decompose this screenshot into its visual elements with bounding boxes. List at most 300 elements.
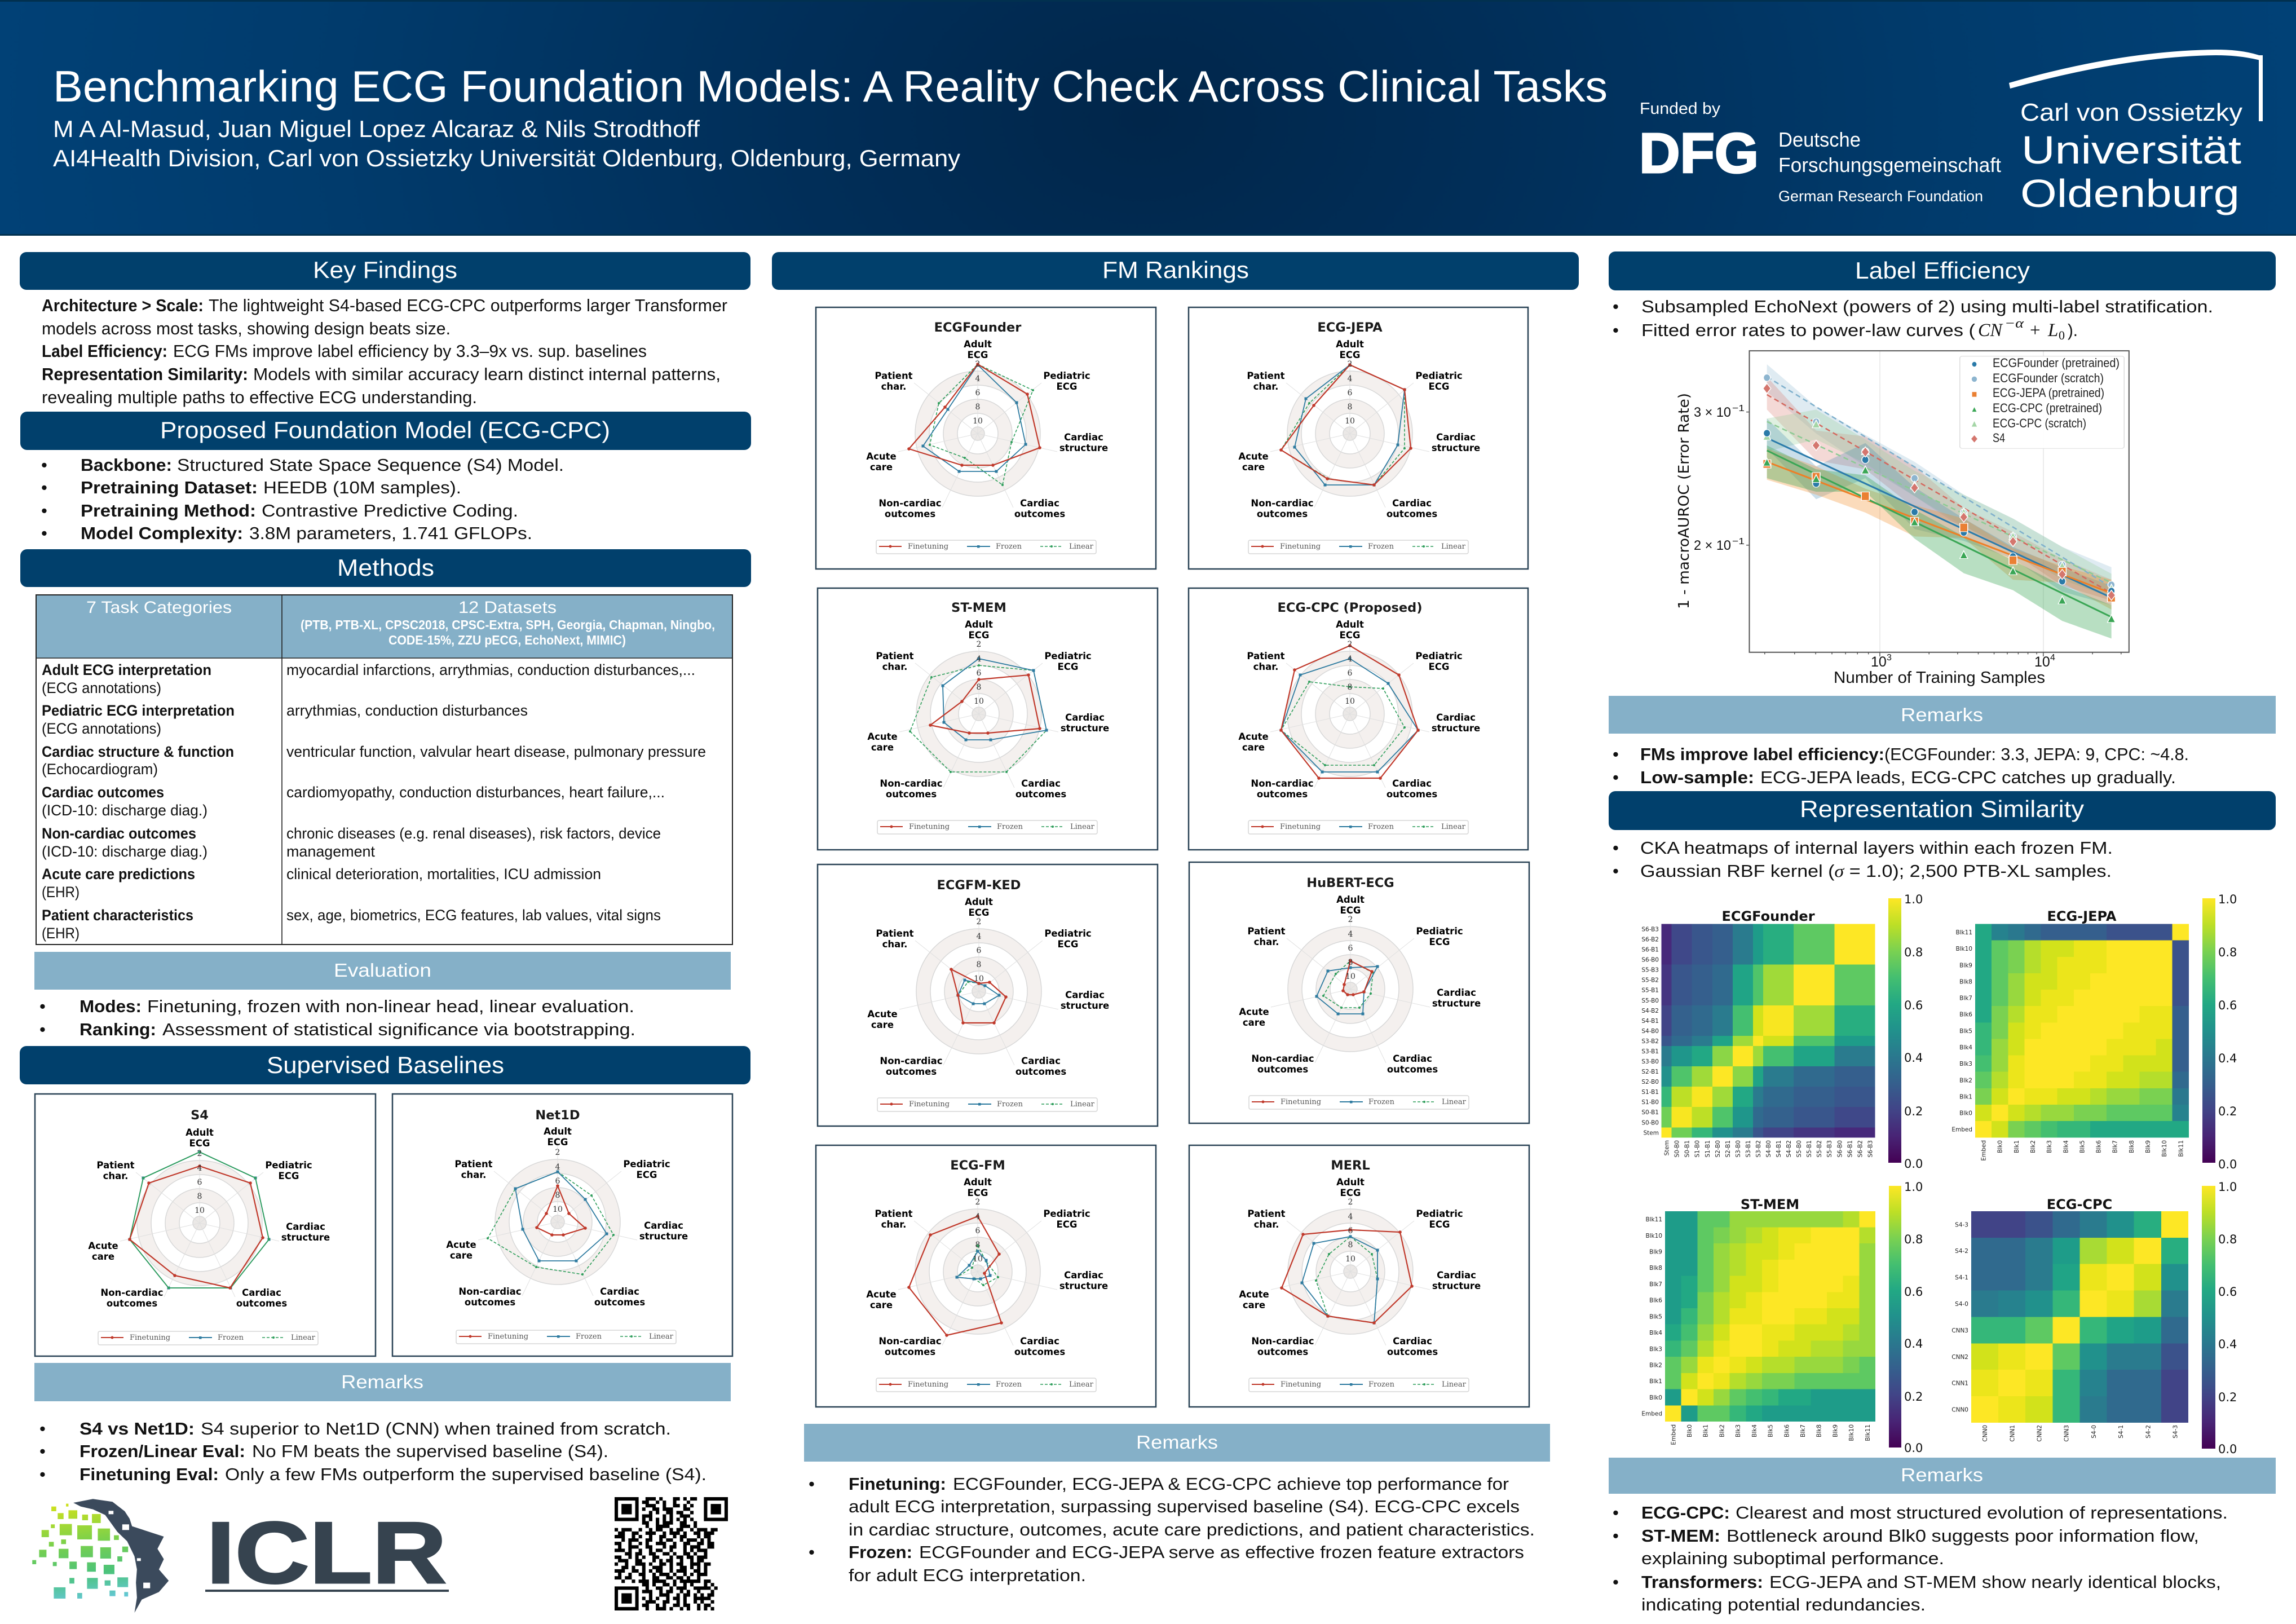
- ECG-JEPA row labels: [1951, 929, 1972, 1133]
- radar chart: ECG-CPC (Proposed): 2: [1348, 640, 1352, 649]
- ST-MEM row labels: Blk6: [1649, 1298, 1662, 1304]
- radar chart: ECG-JEPA: 6: [1348, 389, 1353, 398]
- text block: label efficiency bullets: •: [1613, 320, 1619, 340]
- text block: key findings: revealing multiple paths to effective ECG understanding.: [42, 387, 477, 407]
- ECG-JEPA column labels: Blk7: [2112, 1140, 2119, 1153]
- radar chart: ECGFounder: 4: [975, 374, 981, 383]
- ECG-JEPA column labels: Blk5: [2079, 1140, 2086, 1153]
- text block: baseline remarks: Frozen/Linear Eval:: [80, 1441, 245, 1461]
- radar chart: ECG-CPC (Proposed): char.: [1253, 661, 1278, 672]
- radar chart: ECG-JEPA: outcomes: [1387, 509, 1437, 519]
- radar chart: ECGFM-KED: Pediatric: [1044, 928, 1092, 939]
- heading: Proposed Foundation Model: [20, 412, 751, 450]
- radar chart: HuBERT-ECG: Linear: [1442, 1098, 1467, 1106]
- ECGFounder column labels: S1-B1: [1705, 1140, 1711, 1158]
- ECG-CPC row labels: [1951, 1221, 1968, 1414]
- heading: Key Findings: [20, 252, 750, 290]
- text block: evaluation bullets: [39, 996, 635, 1039]
- ECGFounder row labels: S6-B0: [1641, 957, 1659, 964]
- radar chart: ECG-CPC (Proposed): outcomes: [1257, 789, 1308, 800]
- ECGFounder column labels: S1-B0: [1694, 1140, 1701, 1158]
- radar chart: ST-MEM: Cardiac: [1065, 712, 1105, 723]
- text block: representation remarks: •: [1613, 1503, 1619, 1522]
- text block: representation remarks: •: [1613, 1526, 1619, 1546]
- radar chart: ST-MEM: Patient: [876, 651, 914, 661]
- text block: label efficiency bullets: [1613, 297, 2213, 342]
- ST-MEM column labels: Blk5: [1767, 1424, 1774, 1437]
- ECG-JEPA colorbar: 0.0: [2218, 1158, 2237, 1171]
- text block: representation remarks: •: [1613, 1572, 1619, 1592]
- text block: ranking remarks: •: [809, 1474, 815, 1494]
- ST-MEM colorbar: 0.0: [1904, 1441, 1923, 1455]
- ECGFounder colorbar: 0.6: [1904, 999, 1923, 1012]
- ECG-CPC row labels: S4-1: [1955, 1274, 1968, 1281]
- ECGFounder column labels: S6-B2: [1857, 1140, 1864, 1158]
- radar chart: ST-MEM: char.: [882, 661, 907, 672]
- radar chart: HuBERT-ECG: char.: [1254, 937, 1279, 947]
- radar chart: ECG-JEPA: 2: [1348, 360, 1352, 369]
- table rows: ventricular function, valvular heart disease, pulmonary pressure: [286, 743, 706, 760]
- ECG-CPC row labels: S4-3: [1955, 1221, 1968, 1228]
- text block: representation remarks: ECG-CPC:: [1641, 1503, 1730, 1522]
- text block: baseline remarks: •: [39, 1419, 46, 1438]
- ECGFounder column labels: S4-B2: [1786, 1140, 1792, 1158]
- ST-MEM row labels: Blk2: [1649, 1362, 1662, 1369]
- heading: Supervised Baselines: [20, 1046, 750, 1084]
- radar chart: ECGFM-KED: 2: [977, 917, 981, 926]
- heading: Methods: Methods: [337, 554, 434, 581]
- authors: M A Al-Masud, Juan Miguel Lopez Alcaraz & Nils Strodthoff: [53, 116, 700, 142]
- text block: key findings: Label Efficiency:: [42, 341, 167, 361]
- funding note and DFG logo: DFG: [1639, 122, 1759, 185]
- heading: Supervised Baselines: Supervised Baselines: [267, 1052, 504, 1078]
- radar chart: ECG-FM: 6: [975, 1226, 981, 1235]
- text block: ranking remarks: •: [809, 1542, 815, 1562]
- radar chart: ST-MEM: Adult: [965, 619, 993, 630]
- table rows: (EHR): [42, 925, 80, 942]
- radar chart: ST-MEM: ECG: [969, 630, 989, 641]
- ECGFounder row labels: S2-B1: [1641, 1069, 1659, 1075]
- radar chart: HuBERT-ECG: care: [1243, 1017, 1265, 1028]
- radar chart: ECGFM-KED: Acute: [867, 1009, 898, 1020]
- radar chart: ST-MEM: care: [871, 742, 894, 753]
- radar chart: S4: char.: [103, 1171, 128, 1181]
- radar chart: ECG-JEPA: Non-cardiac: [1251, 498, 1314, 509]
- text block: representation remarks: explaining suboptimal performance.: [1641, 1548, 1944, 1568]
- heading: Evaluation: [34, 952, 731, 990]
- radar chart: ECGFM-KED: [818, 864, 1158, 1126]
- radar chart: HuBERT-ECG: Patient: [1247, 926, 1286, 937]
- text block: key findings: Representation Similarity:: [42, 364, 248, 384]
- heatmap: ECG-JEPA: [1951, 893, 2237, 1171]
- radar chart: ECG-FM: Patient: [875, 1208, 913, 1219]
- radar chart: ECG-JEPA: Finetuning: [1280, 542, 1321, 551]
- radar chart: MERL: char.: [1254, 1219, 1279, 1230]
- ECGFounder column labels: S2-B0: [1715, 1140, 1721, 1158]
- heading: Proposed Foundation Model: Proposed Foundation Model (ECG-CPC): [160, 417, 610, 443]
- radar chart: ST-MEM: 4: [977, 655, 982, 664]
- table rows: (EHR): [42, 884, 80, 901]
- ECGFounder row labels: S4-B2: [1641, 1008, 1659, 1014]
- table rows: Pediatric ECG interpretation: [42, 702, 235, 719]
- ECG-JEPA column labels: Blk11: [2178, 1140, 2184, 1157]
- table rows: cardiomyopathy, conduction disturbances, heart failure,...: [286, 784, 665, 801]
- ECG-CPC colorbar: 1.0: [2218, 1180, 2237, 1194]
- ECG-JEPA colorbar: 1.0: [2218, 893, 2237, 906]
- plot legend text: S4: [1993, 431, 2005, 445]
- text block: proposed model bullets: •: [41, 501, 47, 520]
- text block: baseline remarks: No FM beats the supervised baseline (S4).: [252, 1441, 608, 1461]
- ECGFounder row labels: S5-B1: [1641, 987, 1659, 994]
- table header: 7 Task Categories: [86, 598, 232, 617]
- radar chart: ECGFM-KED: 8: [977, 960, 981, 969]
- radar chart: ECGFounder: 2: [975, 360, 980, 369]
- radar chart: ECGFM-KED: outcomes: [1015, 1066, 1066, 1077]
- heading: Remarks (baselines): [34, 1363, 731, 1401]
- ECG-CPC colorbar: 0.0: [2218, 1442, 2237, 1456]
- heading: FM Rankings: FM Rankings: [1102, 257, 1249, 283]
- radar chart: MERL: 10: [1345, 1255, 1355, 1264]
- ECGFounder colorbar: [1888, 893, 1923, 1171]
- radar chart: Net1D: 2: [555, 1148, 560, 1157]
- text block: proposed model bullets: Pretraining Method:: [81, 501, 256, 520]
- ECG-JEPA column labels: Blk1: [2014, 1140, 2020, 1153]
- radar chart: S4: [35, 1094, 376, 1356]
- radar chart: ECGFounder: outcomes: [885, 509, 935, 519]
- radar chart: Net1D: structure: [639, 1231, 688, 1242]
- text block: label efficiency bullets: L: [2047, 320, 2058, 341]
- radar chart: ECG-FM: 10: [973, 1255, 983, 1264]
- radar chart: ST-MEM: Frozen: [997, 823, 1023, 831]
- radar chart: Net1D: Pediatric: [623, 1159, 670, 1170]
- ECG-CPC column labels: S4-0: [2091, 1425, 2098, 1438]
- table rows: management: [286, 843, 375, 860]
- table rows: chronic diseases (e.g. renal diseases), risk factors, device: [286, 825, 661, 842]
- radar chart: ECG-JEPA: outcomes: [1257, 509, 1308, 519]
- radar chart: S4: structure: [281, 1232, 330, 1243]
- radar chart: ECG-CPC (Proposed): ECG: [1429, 661, 1449, 672]
- fit lines: [1767, 377, 2112, 617]
- radar chart: ECG-CPC (Proposed): structure: [1432, 723, 1480, 734]
- funding note and DFG logo: Funded by: [1640, 100, 1721, 118]
- text block: representation remarks: Clearest and most structured evolution of representations.: [1736, 1503, 2228, 1522]
- ECGFounder row labels: Stem: [1644, 1129, 1659, 1136]
- ECG-JEPA row labels: Blk2: [1959, 1077, 1972, 1084]
- ST-MEM column labels: [1670, 1424, 1871, 1445]
- radar chart: ST-MEM: 6: [977, 669, 982, 678]
- radar chart: ST-MEM: outcomes: [1015, 789, 1066, 800]
- ECGFounder column labels: Stem: [1664, 1140, 1671, 1155]
- ECGFounder colorbar: 0.0: [1904, 1157, 1923, 1171]
- text block: representation remarks: indicating potential redundancies.: [1641, 1595, 1926, 1614]
- ECG-JEPA row labels: Blk5: [1959, 1028, 1972, 1035]
- plot axis labels: Number of Training Samples: [1834, 669, 2045, 687]
- radar chart: MERL: Linear: [1442, 1380, 1467, 1389]
- radar chart: ST-MEM: ECG: [1058, 661, 1078, 672]
- text block: key findings: models across most tasks, showing design beats size.: [42, 319, 451, 338]
- radar chart: Net1D: Cardiac: [600, 1286, 639, 1297]
- radar chart: ECGFounder: Patient: [875, 370, 913, 381]
- plot legend box: [1960, 356, 2124, 448]
- table header: CODE-15%, ZZU pECG, EchoNext, MIMIC): [388, 633, 626, 647]
- text block: ranking remarks: for adult ECG interpretation.: [849, 1565, 1086, 1585]
- ECG-JEPA row labels: Blk3: [1959, 1061, 1972, 1067]
- heatmap: ST-MEM: ST-MEM: [1741, 1197, 1799, 1212]
- radar chart: ECG-FM: Frozen: [996, 1380, 1022, 1389]
- radar chart: ECG-JEPA: care: [1242, 462, 1265, 473]
- table rows: (Echocardiogram): [42, 761, 158, 778]
- radar chart: ECG-CPC (Proposed): 4: [1348, 655, 1353, 664]
- radar chart: MERL: 4: [1348, 1212, 1353, 1221]
- ST-MEM row labels: Blk10: [1645, 1233, 1662, 1239]
- radar chart: ECG-CPC (Proposed): Acute: [1238, 731, 1269, 742]
- ECG-CPC row labels: CNN2: [1951, 1354, 1968, 1361]
- radar chart: ECG-JEPA: 4: [1348, 374, 1353, 383]
- table rows: arrythmias, conduction disturbances: [286, 702, 528, 719]
- table rows: (ECG annotations): [42, 679, 161, 696]
- heading: Remarks (rankings): Remarks: [1136, 1432, 1218, 1453]
- radar chart: Net1D: 6: [555, 1177, 560, 1186]
- plot axis labels: 4: [2050, 653, 2055, 663]
- ECG-JEPA colorbar: 0.6: [2218, 999, 2237, 1012]
- QR code: [615, 1497, 728, 1610]
- ECG-CPC column labels: CNN1: [2009, 1425, 2016, 1442]
- ECGFounder row labels: S5-B0: [1641, 998, 1659, 1004]
- radar chart: MERL: 8: [1348, 1241, 1353, 1250]
- radar chart: ST-MEM: [818, 588, 1158, 850]
- text block: baseline remarks: S4 superior to Net1D (CNN) when trained from scratch.: [201, 1419, 671, 1438]
- text block: label efficiency bullets: +: [2030, 320, 2041, 341]
- radar chart: S4: outcomes: [236, 1298, 287, 1309]
- radar chart: ECG-CPC (Proposed): 8: [1348, 683, 1352, 692]
- text block: label efficiency bullets: 0: [2059, 328, 2065, 342]
- text block: label efficiency bullets: ).: [2068, 320, 2078, 340]
- ECG-CPC column labels: CNN0: [1982, 1425, 1989, 1442]
- radar chart: ECG-FM: 4: [975, 1212, 981, 1221]
- radar chart: S4: care: [92, 1251, 114, 1262]
- ST-MEM column labels: Blk0: [1686, 1424, 1693, 1437]
- radar chart: HuBERT-ECG: ECG: [1340, 905, 1361, 916]
- ECGFounder row labels: [1641, 926, 1659, 1136]
- ECG-JEPA row labels: Embed: [1951, 1127, 1972, 1133]
- radar chart: ECGFM-KED: ECG: [969, 907, 989, 918]
- ECGFounder column labels: S6-B3: [1867, 1140, 1874, 1158]
- radar chart: HuBERT-ECG: Pediatric: [1416, 926, 1463, 937]
- radar chart: ECG-JEPA: [1189, 307, 1528, 569]
- radar chart: Net1D: Non-cardiac: [458, 1286, 522, 1297]
- ST-MEM column labels: Embed: [1670, 1424, 1677, 1445]
- radar chart: Net1D: 4: [555, 1163, 560, 1172]
- ECGFounder colorbar: 0.4: [1904, 1051, 1923, 1065]
- radar chart: S4: ECG: [189, 1138, 210, 1149]
- ECG-JEPA column labels: Blk0: [1997, 1140, 2004, 1153]
- radar chart: HuBERT-ECG: 2: [1348, 915, 1353, 924]
- radar chart: ECG-CPC (Proposed): Patient: [1247, 651, 1285, 661]
- icon: ICLR brain mark: [32, 1499, 169, 1613]
- radar chart: ECGFM-KED: 10: [974, 974, 984, 983]
- table rows: Adult ECG interpretation: [42, 661, 211, 678]
- table header: (PTB, PTB-XL, CPSC2018, CPSC-Extra, SPH, Georgia, Chapman, Ningbo,: [301, 617, 715, 632]
- radar chart: ECG-JEPA: Adult: [1336, 339, 1364, 350]
- radar chart: ECGFounder: Finetuning: [908, 542, 948, 551]
- text block: proposed model bullets: [41, 455, 564, 543]
- text block: label efficiency bullets: −α: [2004, 316, 2024, 331]
- plot legend text: ECGFounder (pretrained): [1993, 356, 2120, 370]
- radar chart: MERL: Frozen: [1368, 1380, 1395, 1389]
- radar chart: HuBERT-ECG: HuBERT-ECG: [1306, 876, 1394, 890]
- ECGFounder row labels: S6-B1: [1641, 947, 1659, 954]
- text block: proposed model bullets: 3.8M parameters, 1.741 GFLOPs.: [249, 523, 532, 543]
- ECGFounder row labels: S5-B3: [1641, 967, 1659, 974]
- text block: ranking remarks: adult ECG interpretation, surpassing supervised baseline (S4). ECG-CPC excels: [849, 1497, 1520, 1516]
- heading: Remarks (representation similarity): Remarks: [1901, 1464, 1983, 1485]
- radar chart: MERL: care: [1243, 1300, 1265, 1310]
- ECGFounder column labels: S0-B0: [1674, 1140, 1681, 1158]
- ECGFounder column labels: S4-B1: [1776, 1140, 1782, 1158]
- ST-MEM row labels: Blk0: [1649, 1394, 1662, 1401]
- radar chart: S4: outcomes: [107, 1298, 157, 1309]
- text block: proposed model bullets: HEEDB (10M samples).: [263, 478, 461, 497]
- radar chart: ECG-CPC (Proposed): ECG-CPC (Proposed): [1278, 601, 1422, 615]
- ECG-JEPA column labels: Blk4: [2063, 1140, 2069, 1153]
- ECG-CPC column labels: CNN3: [2064, 1425, 2070, 1442]
- axes frame and ticks: [1749, 351, 2129, 652]
- table rows: myocardial infarctions, arrythmias, conduction disturbances,...: [286, 661, 695, 678]
- ECG-JEPA row labels: Blk0: [1959, 1110, 1972, 1117]
- ECG-CPC row labels: S4-2: [1955, 1248, 1968, 1255]
- radar chart: ECG-FM: Pediatric: [1043, 1208, 1090, 1219]
- radar chart: MERL: Cardiac: [1437, 1270, 1476, 1281]
- radar chart: HuBERT-ECG: Frozen: [1368, 1098, 1395, 1106]
- ECG-JEPA column labels: Blk9: [2145, 1140, 2152, 1153]
- text block: proposed model bullets: •: [41, 523, 47, 543]
- radar chart: MERL: [1189, 1145, 1529, 1407]
- ST-MEM column labels: Blk11: [1865, 1424, 1871, 1441]
- text block: representation similarity bullets: •: [1613, 861, 1619, 881]
- radar chart: ECG-JEPA: Pediatric: [1415, 370, 1463, 381]
- radar chart: Net1D: Finetuning: [488, 1332, 528, 1341]
- radar chart: HuBERT-ECG: Adult: [1336, 894, 1365, 905]
- ECG-CPC colorbar: 0.6: [2218, 1285, 2237, 1299]
- text block: key findings: Architecture > Scale:: [42, 295, 204, 315]
- radar chart: ECGFM-KED: Finetuning: [909, 1100, 950, 1109]
- chart: label efficiency power-law plot: [1676, 351, 2129, 687]
- radar chart: ECG-FM: Adult: [964, 1177, 992, 1188]
- plot legend text: ECG-CPC (pretrained): [1993, 401, 2102, 415]
- radar chart: ECGFounder: Frozen: [996, 542, 1022, 551]
- radar chart: ST-MEM: 2: [977, 640, 981, 649]
- ECG-JEPA column labels: Embed: [1981, 1140, 1988, 1161]
- radar chart: S4: 2: [197, 1149, 202, 1158]
- radar chart: ECGFM-KED: care: [871, 1020, 894, 1030]
- radar chart: Net1D: Net1D: [535, 1108, 580, 1123]
- ST-MEM row labels: Blk3: [1649, 1346, 1662, 1353]
- text block: baseline remarks: Finetuning Eval:: [80, 1464, 219, 1484]
- text block: evaluation bullets: Ranking:: [80, 1020, 156, 1039]
- funding note and DFG logo: Forschungsgemeinschaft: [1778, 153, 2001, 176]
- radar chart: ECG-FM: Linear: [1069, 1380, 1094, 1389]
- text block: evaluation bullets: •: [39, 1020, 46, 1039]
- heatmap: ECG-JEPA: ECG-JEPA: [2047, 908, 2117, 924]
- radar chart: ST-MEM: Linear: [1070, 823, 1095, 831]
- radar chart: ECGFounder: ECG: [1057, 381, 1077, 392]
- text block: ranking remarks: in cardiac structure, outcomes, acute care predictions, and patient characteristics.: [849, 1520, 1535, 1539]
- ST-MEM column labels: Blk10: [1848, 1424, 1855, 1441]
- text block: proposed model bullets: Structured State Space Sequence (S4) Model.: [177, 455, 564, 475]
- text block: baseline remarks: Only a few FMs outperform the supervised baseline (S4).: [225, 1464, 707, 1484]
- radar chart: ECGFM-KED: 4: [977, 932, 982, 941]
- radar chart: ECG-FM: outcomes: [885, 1347, 935, 1357]
- heading: Evaluation: Evaluation: [334, 960, 431, 981]
- radar chart: Net1D: Cardiac: [644, 1220, 683, 1231]
- radar chart: Net1D: ECG: [547, 1137, 568, 1148]
- plot axis labels: 2 × 10: [1694, 538, 1731, 553]
- ECGFounder row labels: S1-B1: [1641, 1089, 1659, 1096]
- ECGFounder colorbar: 0.8: [1904, 946, 1923, 959]
- heatmap: ECG-CPC: ECG-CPC: [2047, 1197, 2112, 1212]
- radar chart: ST-MEM: Finetuning: [909, 823, 950, 831]
- Oldenburg university logo: Carl von Ossietzky: [2020, 99, 2242, 126]
- ST-MEM row labels: Blk1: [1649, 1378, 1662, 1385]
- ECG-JEPA colorbar: 0.4: [2218, 1052, 2237, 1065]
- radar chart: ECGFM-KED: Cardiac: [1021, 1056, 1061, 1066]
- ECG-JEPA row labels: Blk8: [1959, 978, 1972, 985]
- ECG-JEPA colorbar: 0.2: [2218, 1105, 2237, 1118]
- table rows: Acute care predictions: [42, 866, 195, 882]
- Oldenburg university logo: [2009, 50, 2263, 215]
- radar chart: ECGFM-KED: Adult: [965, 897, 993, 907]
- ECG-JEPA row labels: Blk1: [1959, 1093, 1972, 1100]
- funding note and DFG logo: [1639, 100, 2001, 205]
- radar chart: ECGFM-KED: Linear: [1070, 1100, 1095, 1109]
- heatmap: ST-MEM: [1641, 1180, 1923, 1455]
- radar chart: MERL: outcomes: [1387, 1347, 1438, 1357]
- radar chart: ECGFounder: Linear: [1069, 542, 1094, 551]
- radar chart: MERL: ECG: [1340, 1188, 1361, 1198]
- radar chart: ECG-CPC (Proposed): ECG: [1340, 630, 1360, 641]
- radar chart: ECGFounder: 6: [975, 389, 981, 398]
- table rows: [42, 661, 706, 942]
- heatmap: ECGFounder: ECGFounder: [1721, 908, 1815, 924]
- radar chart: ECG-JEPA: 10: [1345, 417, 1355, 426]
- radar chart: ST-MEM: 10: [974, 697, 984, 706]
- radar chart: S4: S4: [191, 1108, 209, 1123]
- ECG-JEPA row labels: Blk10: [1955, 946, 1972, 952]
- ECGFounder row labels: S5-B2: [1641, 977, 1659, 984]
- radar chart: ECGFM-KED: structure: [1061, 1000, 1109, 1011]
- radar chart: ST-MEM: outcomes: [886, 789, 937, 800]
- plot axis labels: 1 - macroAUROC (Error Rate): [1676, 393, 1693, 609]
- text block: key findings: The lightweight S4-based ECG-CPC outperforms larger Transformer: [209, 295, 727, 315]
- radar chart: ECG-JEPA: ECG: [1429, 381, 1449, 392]
- radar chart: HuBERT-ECG: Finetuning: [1281, 1098, 1321, 1106]
- radar chart: S4: ECG: [279, 1171, 299, 1181]
- radar chart: ECG-FM: ECG-FM: [950, 1158, 1005, 1173]
- text block: representation similarity bullets: [1613, 838, 2113, 881]
- radar chart: ECG-CPC (Proposed): care: [1242, 742, 1265, 753]
- radar chart: ECGFounder: Pediatric: [1043, 370, 1090, 381]
- Oldenburg university logo: Oldenburg: [2020, 171, 2240, 215]
- radar chart: S4: Non-cardiac: [100, 1287, 164, 1298]
- plot legend text: ECG-JEPA (pretrained): [1993, 386, 2104, 400]
- ECG-JEPA column labels: Blk10: [2161, 1140, 2168, 1157]
- radar chart: S4: 8: [197, 1192, 202, 1201]
- text block: label efficiency remarks: (ECGFounder: 3.3, JEPA: 9, CPC: ~4.8.: [1884, 744, 2189, 764]
- radar chart: ECG-FM: Acute: [866, 1289, 897, 1300]
- uncertainty bands: [1767, 364, 2112, 638]
- radar chart: MERL: Patient: [1247, 1208, 1286, 1219]
- plot legend text: ECG-CPC (scratch): [1993, 416, 2086, 430]
